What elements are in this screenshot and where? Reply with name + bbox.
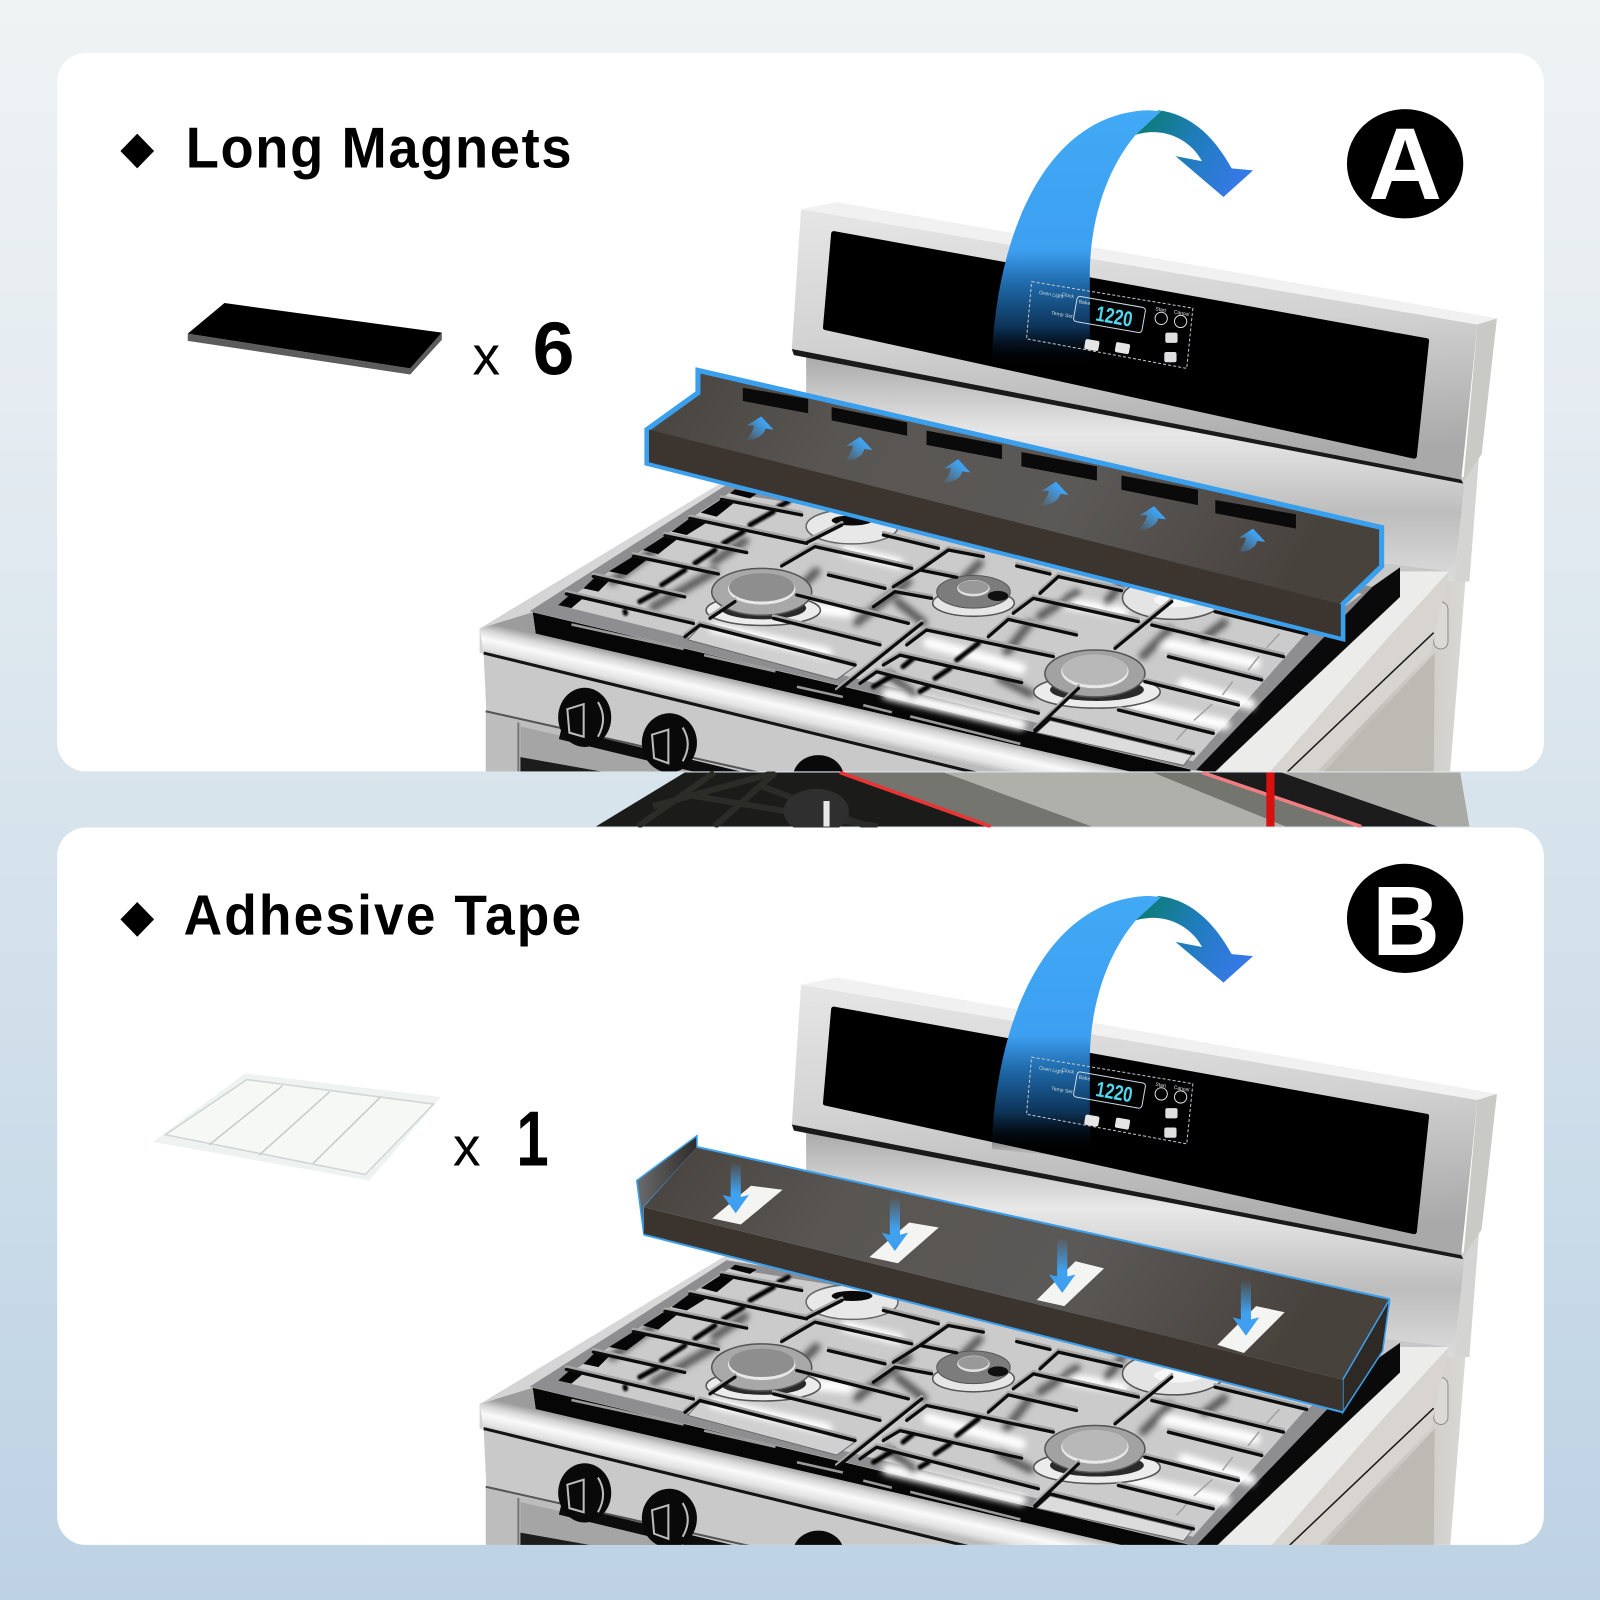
- burner grate: [530, 485, 1372, 770]
- tray blue outline: [644, 1147, 1390, 1412]
- photo strip between panels: [596, 772, 1469, 834]
- cooktop surface: [480, 480, 1449, 788]
- oven display B: Clock: [1061, 1067, 1075, 1076]
- oven display A: Bake: [1078, 299, 1091, 307]
- stove illustration A: [480, 202, 1497, 800]
- oven display A: Temp Set: [1051, 310, 1073, 320]
- stove backsplash: [806, 1130, 1480, 1357]
- heading: Long Magnets: Long Magnets: [186, 116, 572, 180]
- oven display A: Clock: [1061, 292, 1075, 300]
- oven display B: Oven Light: [1038, 1065, 1064, 1076]
- oven display B: 1220: [1094, 1077, 1134, 1107]
- stove control backguard: [792, 978, 1497, 1259]
- control knobs: [558, 1463, 842, 1545]
- quantity: x 6: [472, 307, 574, 391]
- panel: A long magnets: [57, 53, 1544, 771]
- quantity: x 6: x: [472, 324, 500, 386]
- oven display A: Cancel: [1173, 309, 1190, 318]
- oven display A: Start: [1155, 306, 1167, 314]
- shelf front lip: [649, 430, 1341, 637]
- stove control backguard: [792, 202, 1497, 484]
- badge: B: [1347, 864, 1463, 977]
- burners: [706, 1285, 1224, 1484]
- oven display B: Cancel: [1173, 1085, 1190, 1093]
- burner grate: [530, 1260, 1372, 1546]
- tray front lip: [644, 1207, 1343, 1412]
- oven display A: Oven Light: [1038, 290, 1064, 300]
- shelf B tray: [637, 1136, 1390, 1412]
- control knobs: [558, 688, 843, 772]
- stove backsplash: [806, 354, 1480, 582]
- badge: A: [1347, 107, 1463, 221]
- quantity: x 6: 6: [533, 307, 574, 391]
- quantity: x 1: x: [453, 1115, 481, 1177]
- magnet slots: [743, 388, 1296, 529]
- tray left end: [637, 1136, 697, 1235]
- quantity: x 1: [453, 1095, 549, 1182]
- down arrows: [722, 1162, 1259, 1336]
- oven display B: Start: [1155, 1082, 1167, 1090]
- badge: A: A: [1368, 107, 1442, 221]
- cooktop surface: [480, 1255, 1449, 1563]
- quantity: x 1: 1: [516, 1095, 549, 1182]
- grate bar highlights: [566, 1272, 1307, 1526]
- burners: [706, 509, 1224, 708]
- grate bar highlights: [566, 497, 1307, 751]
- stove cabinet side: [1248, 1346, 1466, 1545]
- big curved arrow A: [992, 110, 1253, 373]
- heading: Adhesive Tape: Adhesive Tape: [184, 883, 581, 947]
- stove cabinet side: [1248, 571, 1466, 772]
- oven display B: [1027, 1057, 1193, 1144]
- stove front panel: [480, 612, 1130, 772]
- oven display B: Bake: [1078, 1075, 1091, 1083]
- stove front panel: [480, 1388, 1120, 1545]
- grate bars: [566, 499, 1307, 753]
- oven display A: [1027, 282, 1193, 368]
- badge: B: B: [1373, 868, 1440, 977]
- tape pieces: [712, 1186, 1285, 1353]
- oven display A: 1220: [1094, 302, 1134, 332]
- icon: adhesive tape sheet: [153, 1073, 441, 1181]
- grate bars: [566, 1275, 1307, 1529]
- stove illustration B: [480, 978, 1497, 1576]
- panel: B adhesive tape: [57, 828, 1544, 1545]
- tray right end: [1343, 1299, 1390, 1412]
- big curved arrow B: [992, 896, 1253, 1159]
- icon: magnet strip: [188, 303, 442, 374]
- oven display B: Temp Set: [1051, 1086, 1073, 1096]
- shelf A with blue outline: [647, 370, 1382, 639]
- small up arrows: [745, 416, 1265, 553]
- tray floor: [644, 1147, 1390, 1380]
